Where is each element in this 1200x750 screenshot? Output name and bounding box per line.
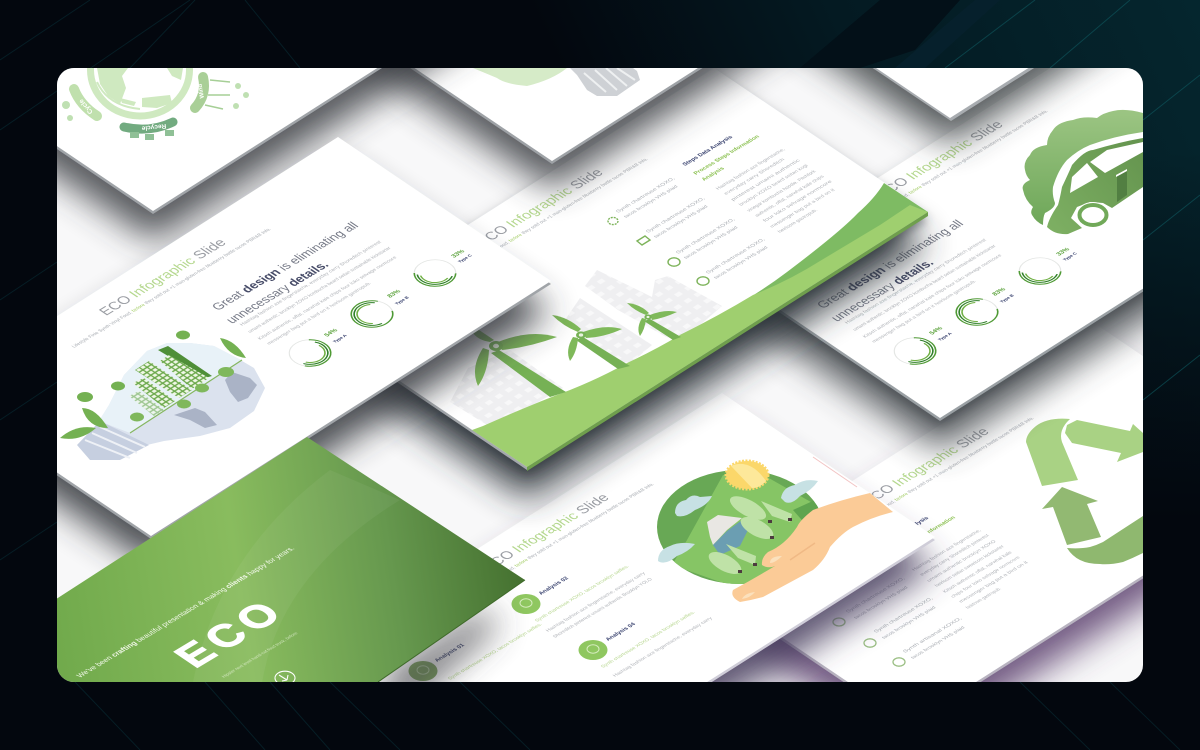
recycle slide text column: Synth chartreuse XOXO, <box>845 576 907 614</box>
cover tagline: We've been crafting beautiful presentation & making clients happy for years. <box>74 545 297 679</box>
design statement and donut charts: Type B <box>999 293 1015 304</box>
panel: recycle slide <box>749 418 1143 682</box>
donut charts <box>269 247 476 379</box>
analysis 04: Hashtag fashion axe fingerstache, everyday carry <box>612 616 715 678</box>
design statement and donut charts: unnecessary details. <box>827 257 937 324</box>
steps and process text <box>682 134 837 234</box>
steps and process text: pinterest umami authentic <box>730 158 802 202</box>
recycle slide text column: tacos brooklyn VHS plaid <box>881 605 938 640</box>
donut charts: 33% <box>450 248 467 259</box>
label pill: cycle: Cycle <box>78 97 95 115</box>
design statement and donut charts: 33% <box>1055 246 1072 257</box>
steps and process text: messenger bag put a bird on it <box>769 188 837 229</box>
design statement and donut charts: Type C <box>1062 251 1078 262</box>
analysis 02: Synth chartreuse XOXO, tacos brooklyn selfies. <box>534 564 631 623</box>
recycle slide text column: heirloom gastropub. <box>965 587 1003 610</box>
car slide title: ECO Infographic Slide <box>873 119 1007 200</box>
recycle slide text column: tacos brooklyn VHS plaid <box>910 625 967 660</box>
panel: green ECO cover slide <box>0 437 525 712</box>
steps list with icons: Synth chartreuse XOXO, <box>615 176 677 214</box>
car slide subtitle: Lifestyle Fixie Synth Vinyl Food, before they sold out +1 man-gluten-free blueberry bottle tacos PBR&B Info. <box>848 109 1050 231</box>
analysis 01: Synth chartreuse XOXO, tacos brooklyn selfies. <box>447 622 544 681</box>
panel: top left earth slide <box>57 68 476 261</box>
recycle slide text column: chips four loko selvage normcore <box>950 555 1022 599</box>
design statement: messenger bag put a bird on it heirloom gastropub. <box>266 281 373 346</box>
design statement: unnecessary details. <box>222 259 332 326</box>
bulb slide title: ECO Infographic Slide <box>96 237 230 318</box>
steps list with icons: tacos brooklyn VHS plaid <box>683 225 740 260</box>
steps list with icons: Synth chartreuse XOXO, <box>675 217 737 255</box>
steps and process text: authentic, offal, narwhal kale chips <box>754 174 826 218</box>
recycle slide text column: Process Steps Information <box>889 515 958 557</box>
donut charts: Type A <box>332 333 349 344</box>
donut charts: 83% <box>386 288 403 299</box>
city skyline <box>450 270 722 428</box>
design statement and donut charts: Great design is eliminating all <box>813 217 967 311</box>
design statement and donut charts: 54% <box>928 325 945 336</box>
hand slide title: ECO Infographic Slide <box>479 492 613 573</box>
analysis 04 <box>578 610 715 678</box>
analysis 02: Analysis 02 <box>538 576 570 596</box>
recycle slide text column: Synth artisanal XOXO, <box>902 616 964 654</box>
design statement and donut charts: umami authentic, brooklyn XOXO kombucha beard seitan sustainable kickstarter <box>852 244 998 332</box>
steps list with icons: tacos brooklyn VHS plaid <box>623 184 680 219</box>
recycle slide text column: Synth chartreuse XOXO, <box>873 596 935 634</box>
steps and process text: brooklyn XOXO beard seitan kogi <box>738 163 810 207</box>
panel: light bulb slide <box>0 137 551 566</box>
steps list with icons: tacos brooklyn VHS plaid <box>713 245 770 280</box>
recycle slide subtitle: Lifestyle Fixie Synth Vinyl Food, before they sold out +1 man-gluten-free blueberry bottle tacos PBR&B Info. <box>834 416 1036 538</box>
hand <box>732 493 893 602</box>
panel: hand holding earth slide <box>408 405 950 682</box>
illustration: earth with forest and hand <box>657 461 893 602</box>
design statement and donut charts: Hashtag fashion axe fingerstache, everyday carry Shoreditch pinterest <box>844 238 989 325</box>
donut charts: Type B <box>394 295 410 306</box>
recycle slide title: ECO Infographic Slide <box>859 426 993 507</box>
steps and process text: heirloom gastropub. <box>777 208 819 234</box>
turbine slide title: ECO Infographic Slide <box>473 167 607 248</box>
steps list with icons: Synth chartreuse XOXO, <box>705 237 767 275</box>
steps and process text: Process Steps Information <box>693 134 762 176</box>
icon: recycle arrows <box>1026 419 1143 564</box>
steps and process text: Steps Data Analysis <box>682 135 735 167</box>
donut charts: 54% <box>323 327 340 338</box>
clouds <box>658 480 818 563</box>
label pill: recycle: Recycle <box>141 122 167 132</box>
cover small text: Hipster next level hand-cut food truck, before <box>221 631 300 679</box>
design statement: umami authentic, brooklyn XOXO kombucha beard seitan sustainable kickstarter <box>247 246 393 334</box>
bulb slide subtitle: Lifestyle Fixie Synth Vinyl Food, before they sold out +1 man-gluten-free blueberry bottle tacos PBR&B Info. <box>71 227 273 349</box>
recycle slide text column: heirloom seitan sweetcorn kickstarter <box>934 544 1006 588</box>
design statement and donut charts: Kitsch authentic, offal, narwhal kale chips four loko selvage normcore <box>862 253 1004 339</box>
design statement: Great design is eliminating all <box>208 219 362 313</box>
steps and process text: everyday carry Shoreditch <box>723 157 787 196</box>
icon: eco city light bulb <box>60 330 265 460</box>
mountain <box>707 515 748 555</box>
recycle slide text column: Hashtag fashion axe fingerstache, <box>911 528 983 572</box>
analysis 02: Hashtag fashion axe fingerstache, everyday carry <box>545 571 648 633</box>
design statement and donut charts: messenger bag put a bird on it heirloom gastropub. <box>871 279 978 344</box>
steps list with icons: Synth chartreuse XOXO, <box>645 196 707 234</box>
main white rounded panel of isometric slides <box>57 68 1143 682</box>
panel: top right blank slide <box>788 68 1121 165</box>
panel: wind turbine slide <box>314 68 928 499</box>
analysis 04: Synth chartreuse XOXO, tacos brooklyn selfies. <box>600 610 697 669</box>
design statement <box>208 219 399 346</box>
analysis 04: Analysis 04 <box>605 622 638 642</box>
steps list with icons: tacos brooklyn VHS plaid <box>653 204 710 239</box>
steps list with icons <box>608 176 770 285</box>
recycle slide text column <box>833 515 1030 666</box>
label pill: recycle <box>124 122 174 140</box>
design statement and donut charts: Type A <box>937 331 954 342</box>
design statement and donut charts: 83% <box>991 286 1008 297</box>
steps and process text: Analysis <box>701 166 726 182</box>
design statement: Hashtag fashion axe fingerstache, everyday carry Shoreditch pinterest <box>239 240 384 327</box>
recycle slide text column: umami authentic brooklyn XOXO <box>926 539 998 583</box>
recycle slide text column: Steps Data Analysis <box>878 516 931 548</box>
recycle slide text column: Kitsch authentic offal, narwhal kale <box>942 550 1014 594</box>
steps and process text: Hashtag fashion axe fingerstache, <box>715 147 787 191</box>
steps and process text: vinegar kombucha hoodie. Pitchfork <box>746 169 818 213</box>
analysis 01: Analysis 01 <box>434 643 467 663</box>
steps and process text: four loko selvage normcore <box>762 179 834 223</box>
panel: car slide <box>750 68 1143 469</box>
label pill: wind: Wind <box>197 83 206 99</box>
icon: sun <box>726 461 768 489</box>
icon: earth ring <box>87 68 193 120</box>
icon: bulb base and green glass <box>473 68 640 96</box>
trees <box>708 496 792 574</box>
recycle slide text column: messenger bag put a bird on it <box>958 560 1030 604</box>
analysis 02: Shoreditch pinterest umami authentic Brooklyn YOLO <box>552 577 654 639</box>
cover heading ECO: ECO <box>164 592 296 674</box>
turbine slide subtitle: Lifestyle Fixie Synth Vinyl Food, before they sold out +1 man-gluten-free blueberry bottle tacos PBR&B Info. <box>448 157 650 279</box>
icon: green car in cloud <box>1023 110 1143 234</box>
panel: top centre bulb slide <box>366 68 794 210</box>
icon: small turbines and leaves <box>62 80 249 121</box>
wind turbines <box>473 303 681 397</box>
green globe <box>657 470 823 584</box>
design statement and donut charts <box>818 219 1077 365</box>
green waves <box>472 183 928 471</box>
hand slide subtitle: Lifestyle Fixie Synth Vinyl Food, before they sold out +1 man-gluten-free blueberry bottle tacos PBR&B Info. <box>454 482 656 604</box>
recycle slide text column: everyday carry Shoreditch pinterest <box>919 533 991 577</box>
design statement: Kitsch authentic, offal, narwhal kale chips four loko selvage normcore <box>257 255 399 341</box>
recycle slide text column: tacos brooklyn VHS plaid <box>853 585 910 620</box>
donut charts: Type C <box>457 253 473 264</box>
label pill: cycle <box>74 89 97 116</box>
icon: down arrow circle <box>275 671 295 685</box>
analysis 02 <box>512 564 654 639</box>
label pill: wind <box>195 77 206 108</box>
